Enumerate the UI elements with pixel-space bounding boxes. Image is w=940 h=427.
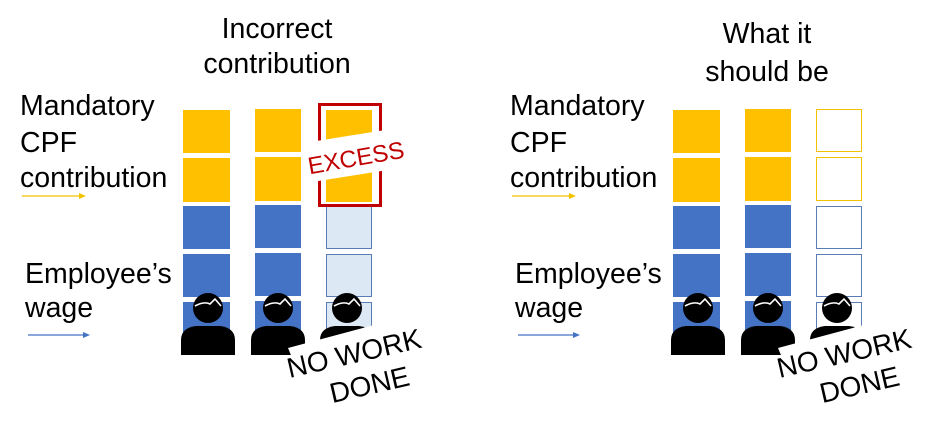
callout: excess frame: EXCESS: [306, 137, 406, 180]
label: mandatory CPF contribution: Mandatory: [510, 90, 645, 122]
heading: what it should be: What it: [723, 18, 811, 50]
column 2: [741, 109, 795, 355]
callout: no work done: DONE: [817, 361, 902, 409]
callout: no work done: [774, 318, 922, 420]
column 1: [671, 110, 725, 355]
label: employee's wage: Employee’s: [25, 258, 172, 290]
label: mandatory CPF contribution: contribution: [20, 162, 167, 194]
label: mandatory CPF contribution: CPF: [20, 127, 77, 159]
column 2: [251, 109, 305, 355]
callout: excess frame: [306, 104, 406, 206]
arrow: blue: [518, 332, 580, 338]
arrow: yellow: [22, 193, 86, 199]
panel: incorrect contribution: [20, 13, 432, 420]
label: mandatory CPF contribution: Mandatory: [20, 90, 155, 122]
column 1: [181, 110, 235, 355]
column 3: empty: [774, 110, 922, 420]
heading: incorrect contribution: contribution: [203, 48, 351, 80]
label: mandatory CPF contribution: contribution: [510, 162, 657, 194]
column 3: excess: [284, 104, 432, 420]
heading: what it should be: should be: [705, 56, 829, 88]
arrow: yellow: [512, 193, 576, 199]
callout: no work done: NO WORK: [284, 323, 425, 384]
callout: no work done: [284, 318, 432, 420]
arrow: blue: [28, 332, 90, 338]
label: employee's wage: Employee’s: [515, 258, 662, 290]
heading: incorrect contribution: Incorrect: [222, 13, 332, 45]
panel: what it should be: [510, 18, 922, 420]
callout: no work done: DONE: [327, 361, 412, 409]
label: mandatory CPF contribution: CPF: [510, 127, 567, 159]
callout: no work done: NO WORK: [774, 323, 915, 384]
label: employee's wage: wage: [24, 292, 93, 324]
label: employee's wage: wage: [514, 292, 583, 324]
